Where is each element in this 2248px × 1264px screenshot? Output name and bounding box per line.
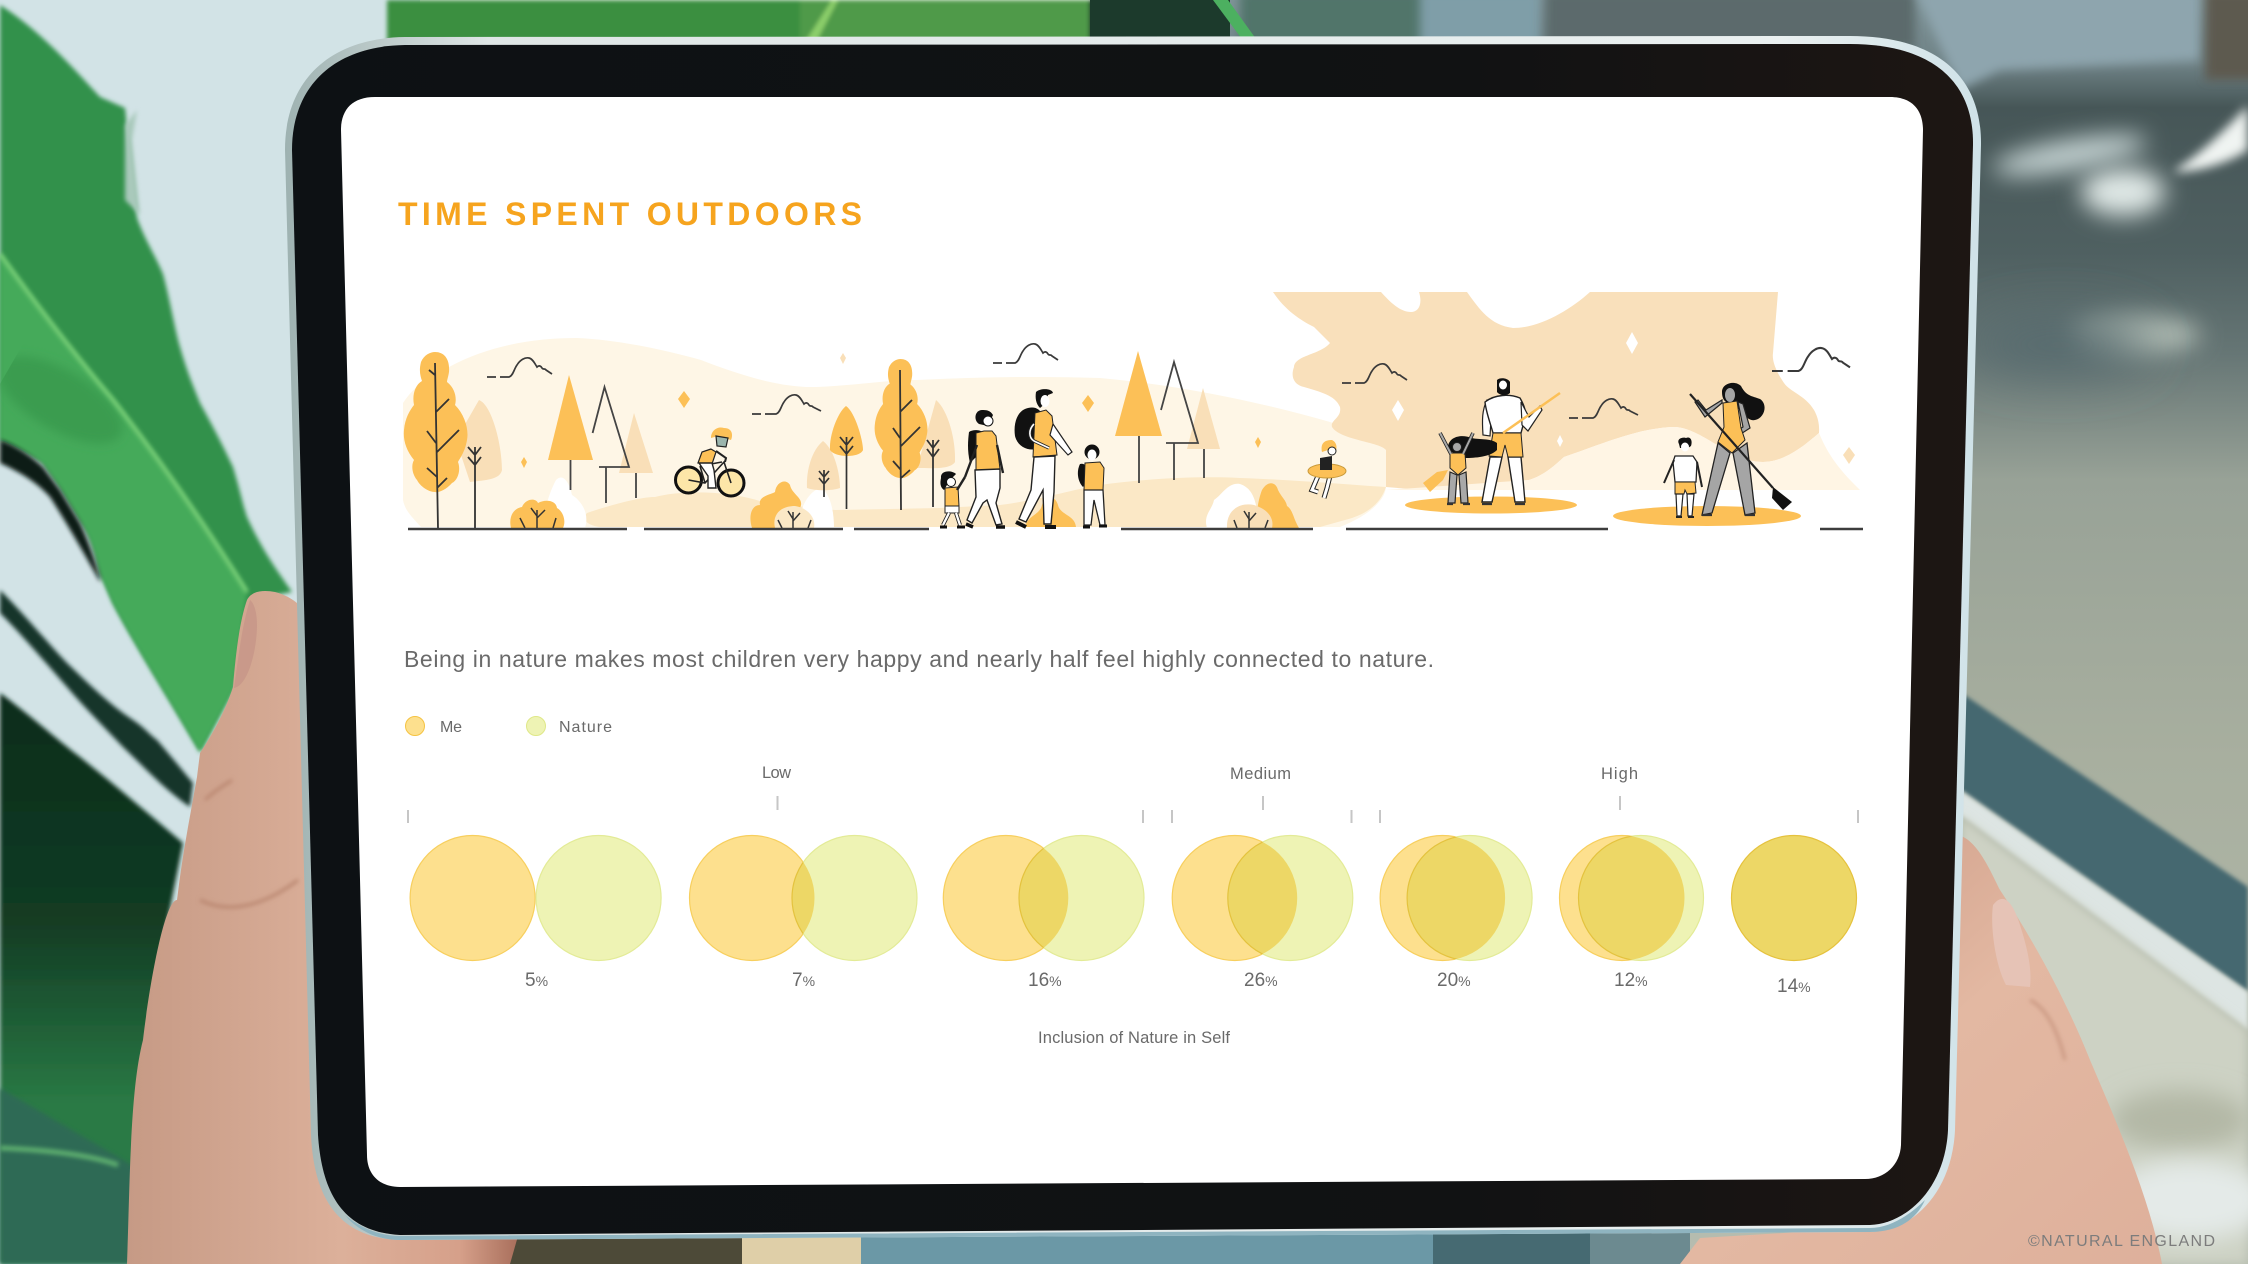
intro sentence: Being in nature makes most children very happy and nearly half feel highly connected to nature.: [404, 646, 1434, 672]
child in swim ring: [1308, 440, 1346, 498]
right hand: [1680, 835, 2162, 1264]
boy on board: [1664, 437, 1702, 517]
trees: triangles: [548, 375, 653, 503]
bush behind man: [1025, 498, 1076, 527]
percentage labels: 7%: [792, 970, 815, 991]
paddle board one: [1405, 496, 1577, 514]
venn 14%: [1732, 836, 1856, 960]
cloud group: [487, 344, 1850, 418]
venn 16%: [943, 836, 1144, 960]
trees: triangles right: [1115, 351, 1220, 483]
thumb nail: [234, 600, 257, 688]
sparkles: [521, 332, 1855, 468]
woman hiker: [965, 410, 1005, 527]
percentage labels: 5%: [525, 970, 548, 991]
title: TIME SPENT OUTDOORS: [398, 196, 862, 232]
percentage labels: 20%: [1437, 970, 1471, 991]
light water: [1386, 427, 1860, 490]
man hiker: [1015, 389, 1072, 527]
finger nail: [1992, 899, 2031, 987]
foreground hills: [585, 477, 1386, 527]
venn 5%: [410, 836, 661, 960]
background hill: [403, 338, 1386, 527]
legend: Nature: [559, 719, 612, 736]
scale labels and ticks: Low: [762, 764, 791, 782]
photo background: top leaf: [387, 0, 1264, 50]
bush: yellow left: [510, 500, 564, 528]
venn 26%: [1172, 836, 1353, 960]
venn 20%: [1380, 836, 1532, 960]
child with backpack: [1078, 444, 1107, 527]
photo background: strip below tablet: [500, 1225, 1690, 1264]
illustration: outdoor scene: [403, 292, 1863, 529]
venn 7%: [690, 836, 917, 960]
bottom rim tint: [345, 1200, 1925, 1240]
axis caption: Inclusion of Nature in Self: [1038, 1029, 1230, 1047]
percentage labels: 12%: [1614, 970, 1648, 991]
copyright: ©NATURAL ENGLAND: [2028, 1233, 2215, 1250]
scale labels and ticks: High: [1601, 765, 1638, 783]
tree: leafy left: [404, 352, 502, 528]
ground lines: [408, 528, 1863, 530]
scale labels and ticks: Medium: [1230, 765, 1291, 783]
tablet: [285, 36, 1981, 1240]
white bushes: [541, 478, 1258, 528]
woman with paddle: [1690, 383, 1792, 515]
water area: [1273, 292, 1819, 490]
tablet rim: [285, 36, 1981, 1240]
tablet screen: [341, 97, 1923, 1187]
little girl walking: [940, 471, 965, 527]
photo background: blurred room on the right: [1090, 0, 2248, 1264]
percentage labels: 26%: [1244, 970, 1278, 991]
tree: teardrop: [807, 406, 863, 509]
scale labels and ticks: [408, 764, 1858, 823]
photo background: left wall and plant: [0, 0, 420, 1264]
percentage labels: [525, 970, 1811, 997]
cyclist: [676, 427, 744, 496]
bush: yellow centre: [750, 481, 814, 528]
legend: Me: [440, 719, 462, 736]
tree: leafy middle: [875, 359, 955, 510]
left hand: [127, 591, 518, 1264]
legend: [406, 716, 612, 736]
percentage labels: 16%: [1028, 970, 1062, 991]
paddle board two: [1613, 506, 1801, 526]
percentage labels: 14%: [1777, 976, 1811, 997]
bush: yellow right: [1227, 483, 1299, 528]
venn 12%: [1560, 836, 1704, 960]
tablet bezel: [292, 44, 1973, 1235]
dad and daughter paddling: [1423, 378, 1560, 504]
